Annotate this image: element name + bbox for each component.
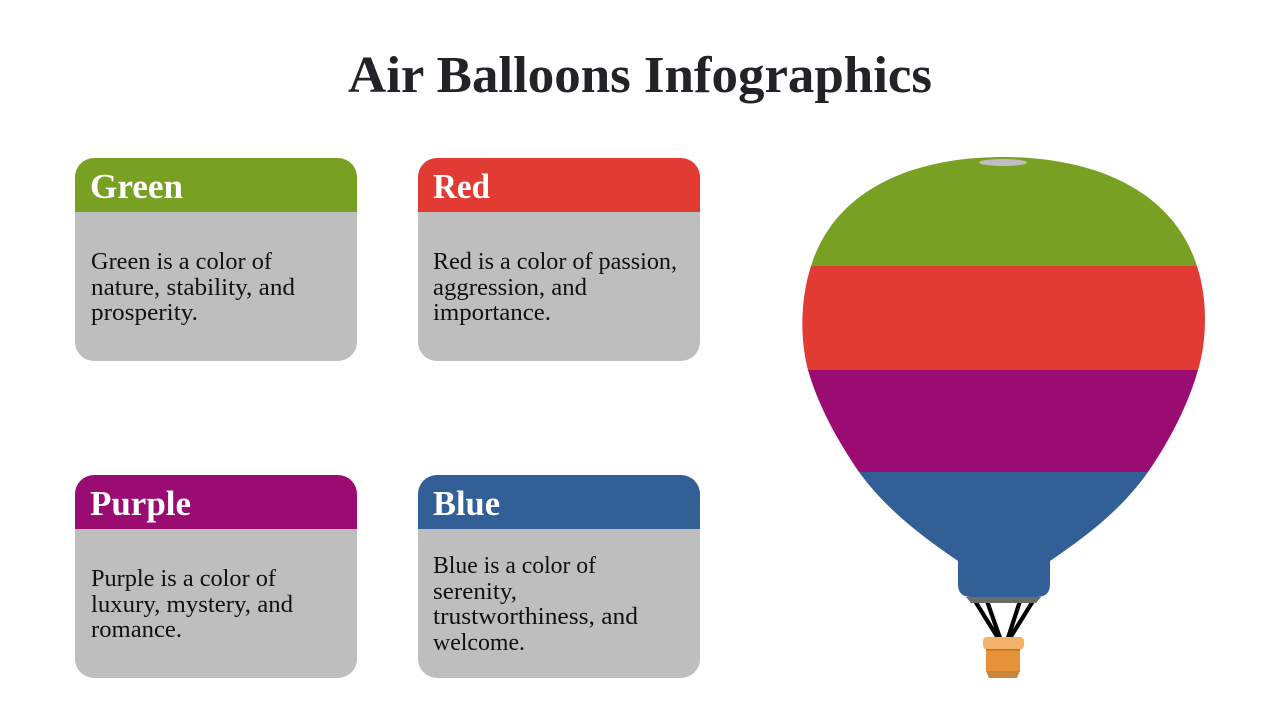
balloon band: purple <box>808 370 1198 472</box>
balloon top vent <box>979 159 1027 166</box>
panel: purple: Purple <box>90 484 191 523</box>
panel: purple <box>75 475 357 678</box>
panel: red: Red <box>433 167 491 206</box>
icon: hot air balloon <box>802 157 1205 678</box>
title: Air Balloons Infographics <box>348 47 932 104</box>
panel: blue <box>418 475 700 678</box>
panel: blue: Blue is a color of <box>433 553 596 579</box>
panel: blue: serenity, <box>433 579 517 605</box>
balloon band: green <box>811 157 1197 266</box>
panel: blue: trustworthiness, and <box>433 604 638 630</box>
panel: red <box>418 158 700 361</box>
panel: purple: romance. <box>91 617 182 643</box>
balloon band: blue <box>859 472 1148 597</box>
panel: red: Red is a color of passion, <box>433 249 677 275</box>
panel: blue: Blue <box>433 484 500 523</box>
burner plate <box>966 597 1041 603</box>
panel: red: importance. <box>433 300 551 326</box>
ropes <box>975 601 1033 638</box>
panel: green: Green is a color of <box>91 249 272 275</box>
panel: green <box>75 158 357 361</box>
panel: green: Green <box>90 167 183 206</box>
balloon band: red <box>802 266 1205 370</box>
basket <box>983 637 1024 678</box>
panel: purple: Purple is a color of <box>91 566 276 592</box>
panel: blue: welcome. <box>433 630 525 656</box>
panel: red: aggression, and <box>433 275 587 301</box>
panel: purple: luxury, mystery, and <box>91 592 293 618</box>
panel: green: nature, stability, and <box>91 275 295 301</box>
panel: green: prosperity. <box>91 300 198 326</box>
